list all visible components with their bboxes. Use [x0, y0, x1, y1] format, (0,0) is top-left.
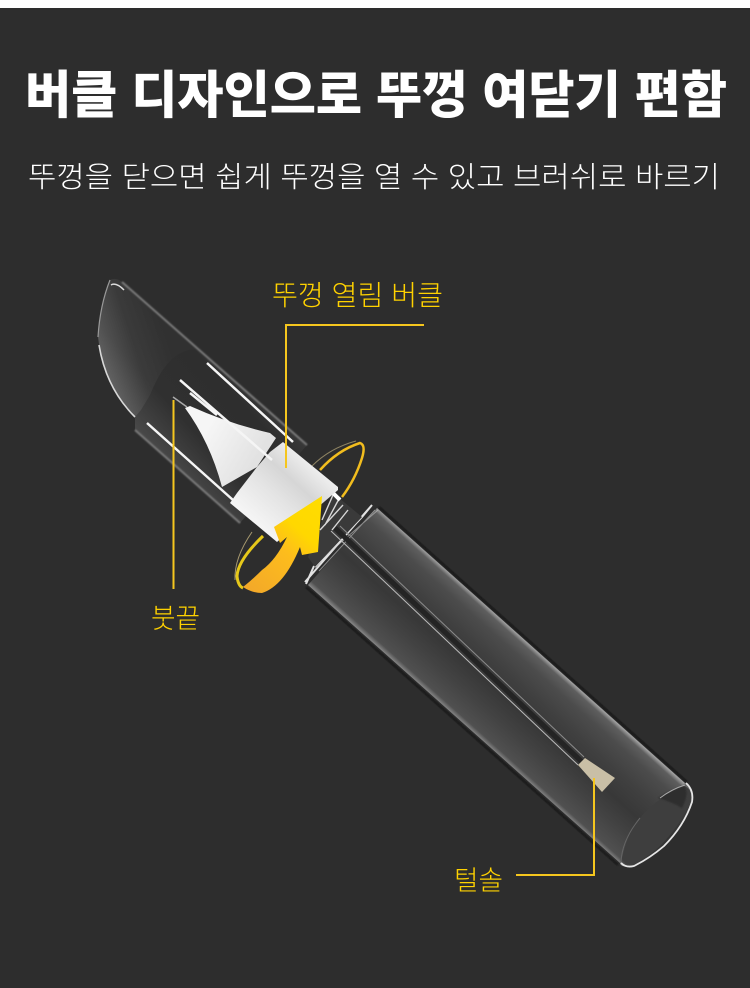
cap	[98, 279, 307, 523]
callout: brush tip: 붓끝	[151, 604, 200, 634]
callout: cap opening buckle	[272, 280, 443, 468]
callout: bristle brush	[454, 778, 594, 896]
collar	[305, 505, 372, 584]
rotation ring: front	[235, 532, 263, 588]
bottle tube	[305, 505, 693, 867]
callout: cap opening buckle: 뚜껑 열림 버클	[272, 280, 443, 311]
rotation ring: back	[312, 441, 364, 497]
callout: bristle brush: 털솔	[454, 866, 503, 896]
brush tip body	[173, 380, 338, 542]
title: 버클 디자인으로 뚜껑 여닫기 편함	[25, 67, 727, 124]
brush stem	[331, 526, 584, 765]
brush bristles	[578, 758, 615, 792]
product: transparent brush bottle	[98, 279, 693, 867]
rotation arrow	[243, 496, 322, 593]
tube opening	[622, 786, 691, 864]
neck connector	[308, 493, 362, 567]
subtitle: 뚜껑을 닫으면 쉽게 뚜껑을 열 수 있고 브러쉬로 바르기	[28, 162, 720, 194]
